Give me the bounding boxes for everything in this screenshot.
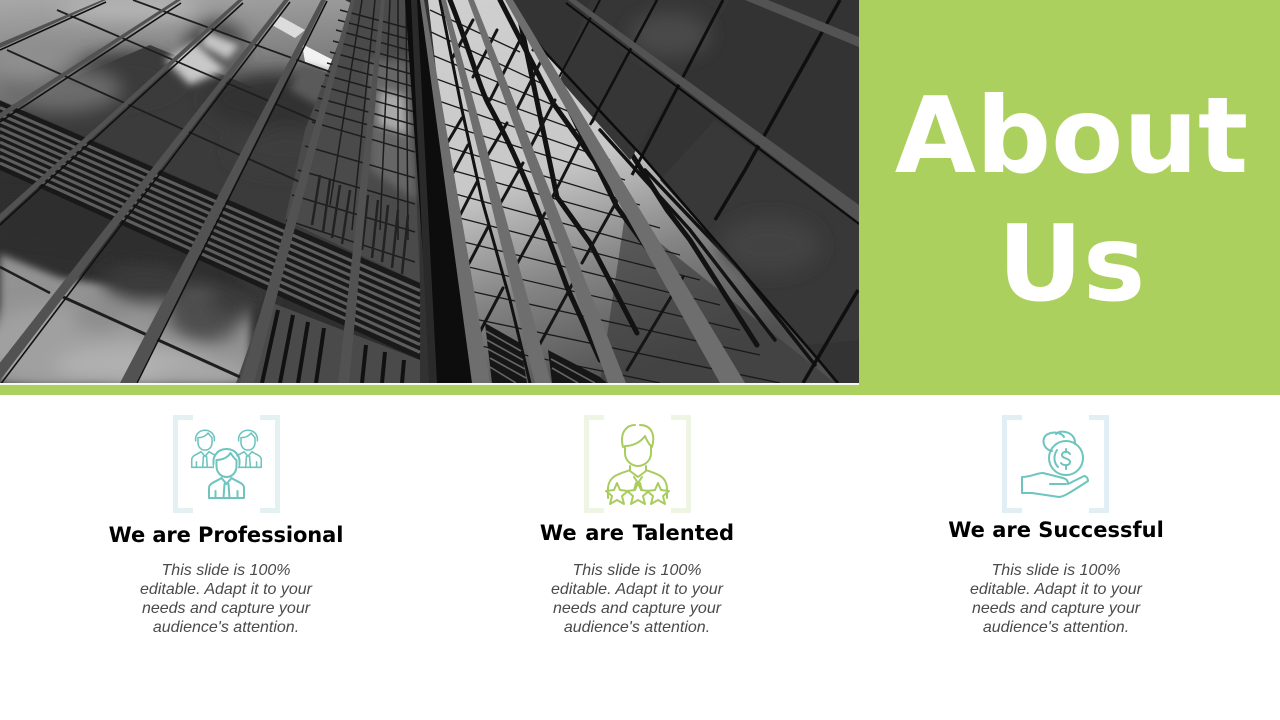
vertical-stripe facade under louvres <box>236 300 420 383</box>
body text: needs and capture your <box>972 600 1140 616</box>
body text: editable. Adapt it to your <box>970 580 1142 598</box>
panel: title <box>859 0 1280 395</box>
body text: audience's attention. <box>153 618 299 636</box>
icon: hand holding coins in brackets <box>1002 415 1109 513</box>
short cross bars <box>443 0 683 370</box>
body text: audience's attention. <box>564 618 710 636</box>
body text <box>551 562 724 636</box>
panel: We are Successful <box>948 415 1164 636</box>
lower-left glass and clouds <box>0 170 420 383</box>
body text: needs and capture your <box>142 600 310 616</box>
heading: We are Successful <box>948 518 1164 542</box>
edge line of the dark panels <box>536 39 839 383</box>
bright window field <box>428 0 835 383</box>
louvre band <box>0 101 420 360</box>
green divider band <box>0 385 859 395</box>
upper-left glass <box>0 0 350 110</box>
dark window bars running down the fan <box>440 0 815 383</box>
right panel diagonals <box>555 0 858 383</box>
mullions, left fan <box>0 0 385 383</box>
heading: We are Talented <box>540 521 734 545</box>
body text <box>970 562 1142 636</box>
fine grid facade <box>285 0 420 283</box>
photo: glass skyscraper looking up <box>0 0 859 383</box>
icon: team of three in brackets <box>173 415 280 513</box>
body text: needs and capture your <box>553 600 721 616</box>
central dark column <box>405 0 478 383</box>
horizontal-facing transoms <box>0 0 333 377</box>
body text <box>140 562 312 636</box>
body text: editable. Adapt it to your <box>140 580 312 598</box>
body text: audience's attention. <box>983 618 1129 636</box>
icon: person with three stars in brackets <box>584 415 691 513</box>
body text: editable. Adapt it to your <box>551 580 723 598</box>
white rule under photo <box>0 383 859 385</box>
panel: We are Professional <box>109 415 343 636</box>
panel: We are Talented <box>540 415 734 636</box>
dark right-hand panels <box>538 0 568 43</box>
mullions, right fan <box>420 0 745 383</box>
lower louvres <box>485 323 527 383</box>
thin window transoms <box>430 10 780 383</box>
body text: This slide is 100% <box>992 562 1120 578</box>
heading: About: About <box>895 75 1248 197</box>
heading: We are Professional <box>109 523 343 547</box>
heading: Us: Us <box>998 203 1145 325</box>
body text: This slide is 100% <box>162 562 290 578</box>
body text: This slide is 100% <box>573 562 701 578</box>
